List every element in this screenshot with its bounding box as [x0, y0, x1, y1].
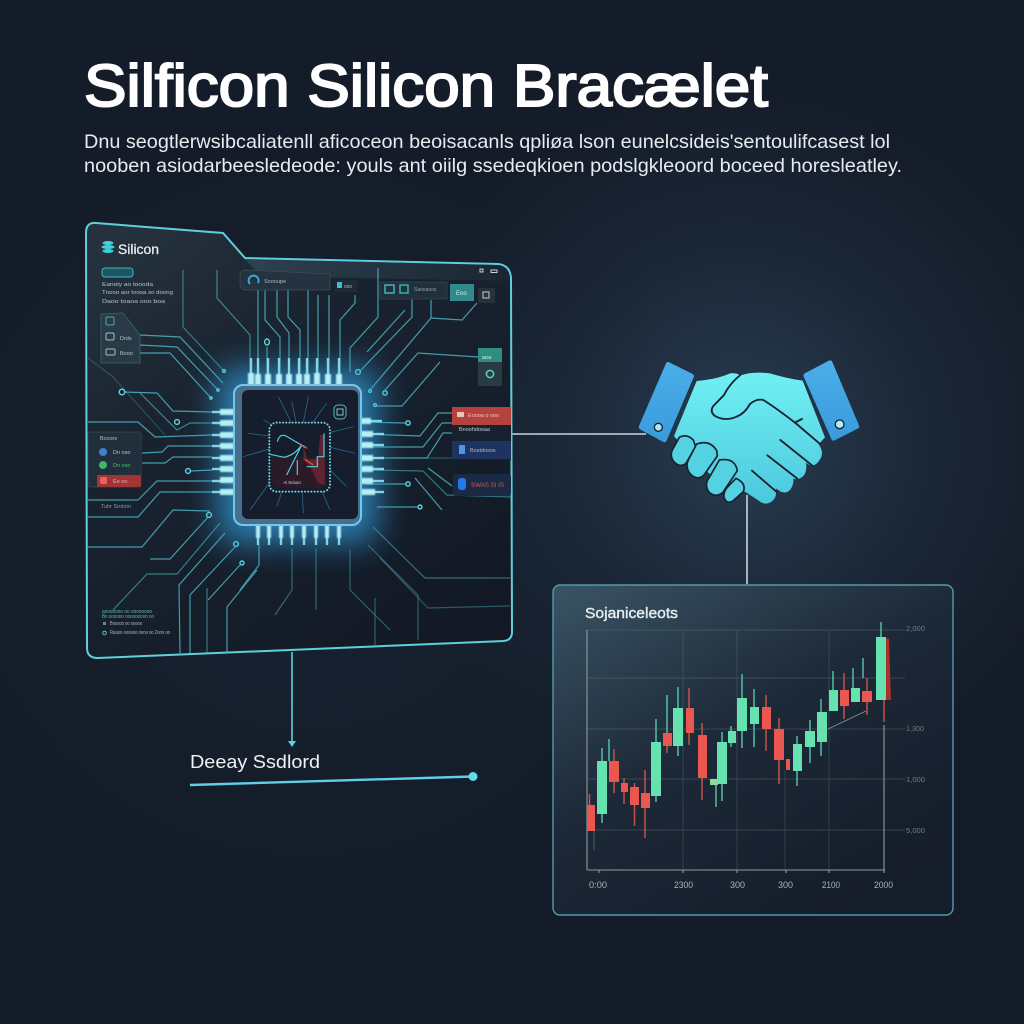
- y axis labels: 2,000: [906, 624, 925, 633]
- chip emblem: [243, 397, 355, 513]
- title: Silficon Silicon Bracælet: [84, 53, 768, 119]
- sidebar micro text: [102, 282, 173, 305]
- chart title: Sojaniceleots: [585, 606, 678, 622]
- footnote text: Bo oooooo ooooooooo oo: [102, 614, 154, 620]
- small icon card: [101, 313, 140, 363]
- dark red candle: [886, 638, 891, 700]
- y axis labels: 1,000: [906, 775, 925, 784]
- panel frame: [86, 223, 512, 658]
- chart frame: [553, 585, 953, 915]
- green widget: [478, 348, 502, 386]
- teal button: Eoo: [456, 291, 467, 297]
- status list card: Bcoors: [100, 436, 117, 442]
- window controls: [480, 269, 497, 272]
- dim button: [478, 288, 495, 303]
- x axis labels: 0:00: [589, 880, 607, 891]
- top tab 2: oso: [344, 284, 352, 290]
- status list card: Dn oso: [113, 450, 130, 456]
- footnote text: [102, 609, 170, 636]
- connector: panel to handshake: [512, 433, 646, 435]
- sidebar micro text: Tnooo aor toooa so doong: [102, 290, 173, 296]
- status caption: Tuhr Srotom: [101, 504, 131, 510]
- logo icon: [102, 241, 114, 253]
- candle wicks: [590, 622, 884, 850]
- panel: dashboard with circuit: [86, 223, 512, 658]
- chip emblem: Ai 8cisan: [283, 480, 301, 485]
- x axis labels: 300: [778, 880, 793, 891]
- top tab 3: [380, 282, 447, 299]
- left cuff button: [654, 423, 662, 431]
- x axis labels: 300: [730, 880, 745, 891]
- panel: candlestick chart: [553, 585, 953, 915]
- subtitle text block: nooben asiodarbeesledeode: youls ant oiilg ssedeqkioen podslgkleoord boceed horesleatley.: [84, 155, 902, 177]
- top tab 1: Soooupe: [264, 279, 286, 285]
- green widget: aoa: [482, 355, 492, 361]
- x axis labels: 2000: [874, 880, 893, 891]
- trace terminals: [119, 339, 422, 565]
- connector: handshake to chart: [746, 495, 748, 584]
- alert widget: Eoooa o ooo: [468, 413, 499, 419]
- pill badge: [102, 268, 133, 277]
- top tab 3: Saooaoos: [414, 287, 437, 293]
- sidebar micro text: Eanoiy ao toooda: [102, 282, 154, 288]
- trend line: [828, 711, 866, 729]
- footnote text: aooooooo oo oooooooo: [102, 609, 152, 615]
- logo text: Silicon: [118, 241, 159, 257]
- chip body: [234, 385, 361, 525]
- status list card: Dn oso: [113, 463, 130, 469]
- top tab 1: [240, 270, 330, 290]
- chip pins: [220, 373, 375, 538]
- x axis labels: 2100: [822, 880, 840, 891]
- left fingers: [671, 436, 744, 502]
- alert widget: Bnoohdosaa: [459, 427, 491, 433]
- hand silhouette: [674, 373, 825, 504]
- microchip: [212, 358, 384, 545]
- mixed candle: [710, 779, 718, 785]
- small icon card: Drds: [120, 336, 132, 342]
- top tab 2: [335, 280, 357, 292]
- header strip: [245, 259, 510, 281]
- sidebar micro text: Daoo toaoa ooo boa: [102, 299, 166, 305]
- y axis labels: 5,000: [906, 826, 925, 835]
- chip pin stems: [212, 358, 384, 545]
- chip glow: [218, 368, 378, 543]
- footnote text: Raaoo oooooo oooo oo 2ooo oo: [110, 630, 170, 636]
- alert widget: [452, 407, 511, 460]
- right cuff: [803, 360, 859, 441]
- teal button: [450, 284, 474, 301]
- status widget: SWAS SI IS: [471, 483, 504, 489]
- hand creases: [712, 375, 820, 492]
- circuit traces: [88, 268, 511, 653]
- chart grid: [587, 630, 905, 870]
- icon: handshake: [639, 360, 859, 504]
- bottom label: Deeay Ssdlord: [190, 752, 320, 772]
- x axis labels: 2300: [674, 880, 693, 891]
- status list card: [88, 432, 141, 487]
- x axis labels: [589, 880, 893, 891]
- subtitle text block: Dnu seogtlerwsibcaliatenll aficoceon beoisacanls qpliøa lson eunelcsideis'sentoulifcasest lol: [84, 131, 890, 153]
- status widget: [453, 474, 511, 496]
- red candles: [587, 690, 872, 831]
- connector: panel to label: [288, 652, 296, 747]
- y axis labels: 1,300: [906, 724, 924, 733]
- alert widget: Bostdosos: [470, 448, 496, 454]
- logo: [102, 241, 159, 257]
- status list card: Eo oo.: [113, 479, 129, 485]
- subtitle text block: [84, 131, 902, 177]
- chip screen: [242, 390, 358, 519]
- y axis labels: [906, 624, 925, 835]
- small icon card: Booo: [120, 351, 133, 357]
- green candles: [597, 637, 886, 814]
- bottom slider line: [190, 772, 478, 785]
- footnote text: Booooo oo ooooo: [110, 621, 142, 627]
- chart axes: [587, 630, 885, 873]
- chip lock icon: [334, 405, 346, 419]
- left cuff: [639, 362, 694, 442]
- right cuff button: [835, 420, 844, 429]
